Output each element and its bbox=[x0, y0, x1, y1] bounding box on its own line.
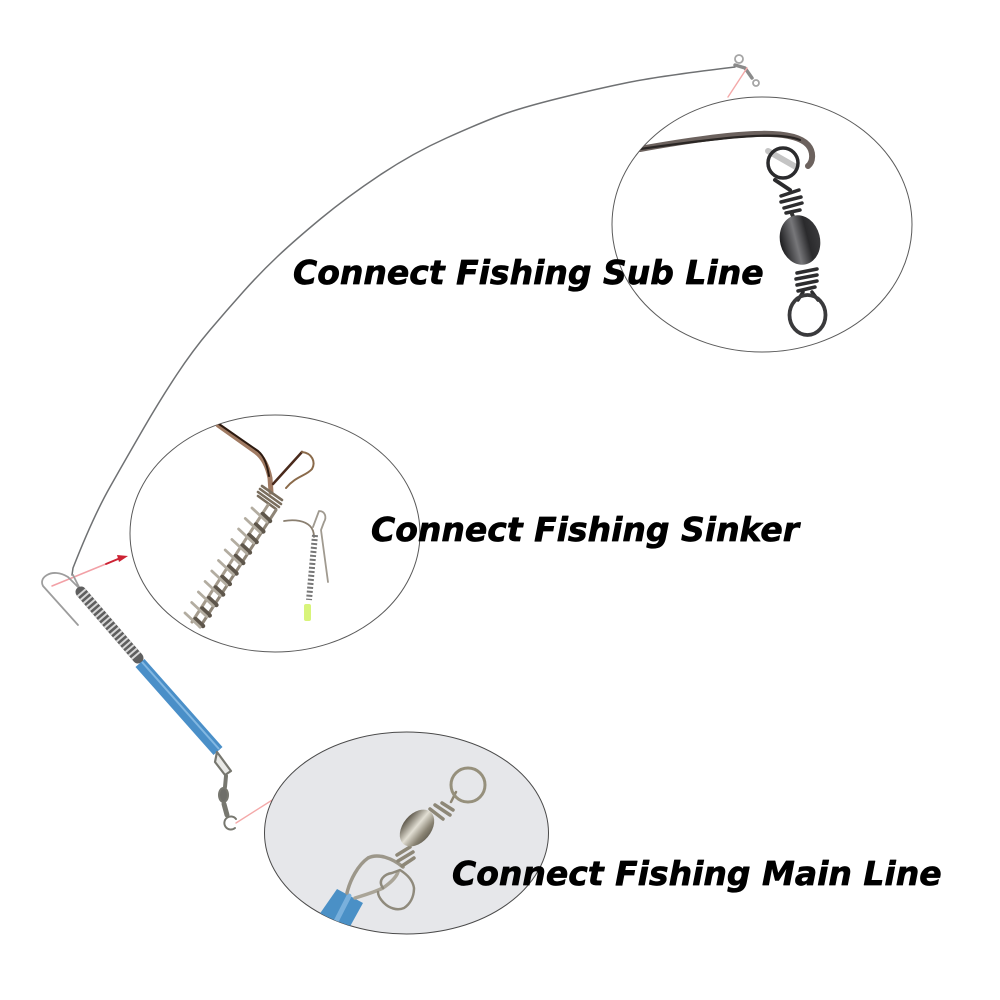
label: sub line: Connect Fishing Sub Line bbox=[293, 253, 764, 292]
fishing wire arc bbox=[72, 67, 735, 575]
wire clip bbox=[42, 573, 80, 625]
small spring clip with green tip bbox=[284, 511, 328, 621]
label: sinker: Connect Fishing Sinker bbox=[371, 510, 801, 549]
connector line to main line callout bbox=[236, 797, 277, 823]
silver swivel with blue tube bbox=[320, 766, 486, 926]
label: main line: Connect Fishing Main Line bbox=[452, 854, 942, 893]
panel: main line callout bbox=[264, 732, 548, 950]
panel: sub line callout bbox=[612, 97, 912, 352]
connector line to sub line callout bbox=[728, 68, 747, 97]
large spring with hook bbox=[185, 424, 314, 627]
spring on rig bbox=[81, 592, 138, 658]
arrow to sinker callout bbox=[52, 555, 128, 586]
panel: sinker callout bbox=[130, 415, 420, 652]
black swivel with wire hook bbox=[640, 134, 826, 335]
small swivel at wire tip bbox=[735, 55, 759, 86]
blue tube bbox=[140, 662, 219, 751]
main line swivel small bbox=[215, 752, 236, 829]
